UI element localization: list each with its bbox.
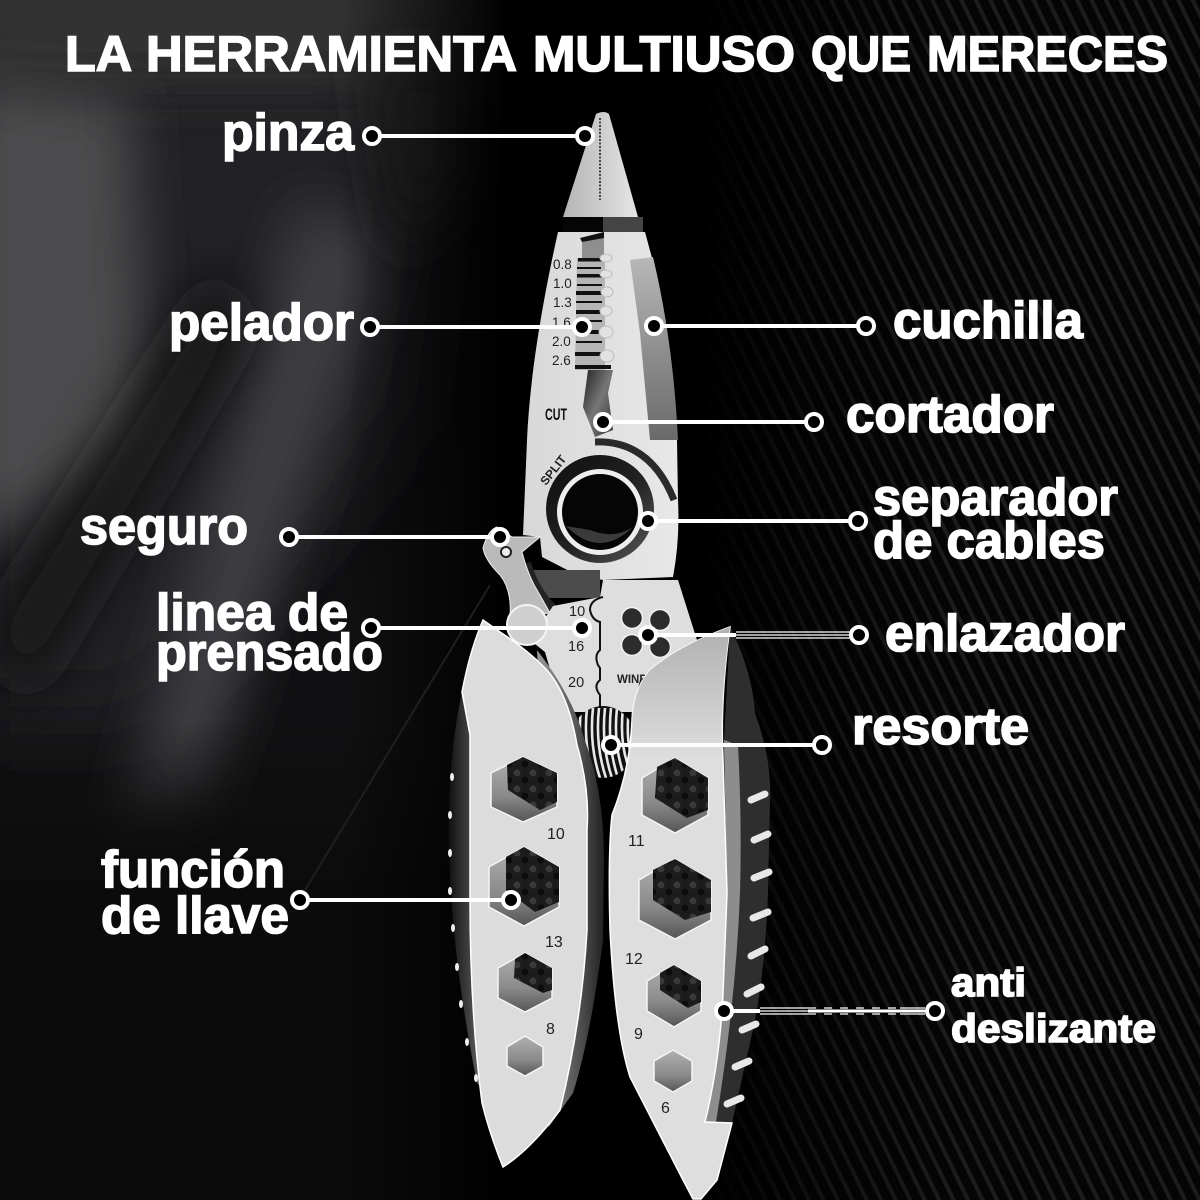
pivot bolt xyxy=(507,605,547,645)
left handle grip xyxy=(449,692,492,1103)
crimp and loop section: 10 xyxy=(569,604,585,620)
wire separator ring: SPLIT xyxy=(537,452,570,488)
wire separator ring xyxy=(537,442,674,563)
spring xyxy=(578,706,631,778)
crimp and loop section: 16 xyxy=(568,639,584,655)
label: función de llave: de llave xyxy=(101,887,289,945)
loop holes xyxy=(622,608,670,658)
label: cortador: cortador xyxy=(846,386,1054,444)
label: separador de cables: separador xyxy=(873,469,1118,527)
label: anti deslizante: deslizante xyxy=(951,1007,1156,1051)
pliers main body xyxy=(523,232,678,580)
pliers main body: 2.6 xyxy=(552,353,571,368)
label: enlazador xyxy=(640,605,1125,663)
right handle grip xyxy=(705,627,770,1123)
label: cortador xyxy=(595,386,1054,444)
title xyxy=(65,26,1168,82)
label: función de llave xyxy=(101,841,519,945)
right handle: 12 xyxy=(625,951,643,968)
left handle: 13 xyxy=(545,934,563,951)
latch seguro xyxy=(483,527,553,617)
label: separador de cables: de cables xyxy=(873,512,1105,570)
label: linea de prensado: prensado xyxy=(156,624,383,682)
label: linea de prensado: linea de xyxy=(156,584,348,642)
label: cuchilla xyxy=(646,292,1084,350)
title: MULTIUSO xyxy=(533,26,795,82)
dark link plate xyxy=(533,570,600,598)
left wrench hexagons xyxy=(489,757,559,1076)
label: anti deslizante: anti xyxy=(951,961,1026,1005)
title: QUE xyxy=(811,26,911,82)
label: función de llave: función xyxy=(101,841,285,899)
pliers tool xyxy=(448,112,770,1199)
right wrench hexagons xyxy=(639,758,711,1092)
label: anti deslizante xyxy=(716,961,1156,1051)
pliers main body: 1.3 xyxy=(553,295,572,310)
label: cuchilla: cuchilla xyxy=(893,292,1084,350)
crimp and loop section xyxy=(530,580,697,712)
label: separador de cables xyxy=(640,469,1118,570)
right handle: 11 xyxy=(628,833,645,850)
label: linea de prensado xyxy=(156,584,590,682)
label: enlazador: enlazador xyxy=(885,605,1125,663)
pliers main body: CUT xyxy=(545,405,567,424)
right handle xyxy=(609,627,770,1199)
pliers upper jaw tip xyxy=(563,112,643,232)
title: LA xyxy=(65,26,132,82)
pliers main body: 1.0 xyxy=(553,276,572,291)
left handle xyxy=(448,620,604,1167)
title: HERRAMIENTA xyxy=(146,26,517,82)
blade cuchilla xyxy=(630,257,678,440)
label: seguro: seguro xyxy=(80,498,248,556)
label: pelador xyxy=(169,294,590,352)
label: pelador: pelador xyxy=(169,294,354,352)
pliers main body: 1.6 xyxy=(552,315,571,330)
right handle: 9 xyxy=(634,1026,643,1043)
label: pinza: pinza xyxy=(222,104,355,162)
right handle: 6 xyxy=(661,1100,670,1117)
crimp and loop section: WINDING xyxy=(617,674,668,686)
left handle: 10 xyxy=(547,826,565,843)
label: seguro xyxy=(80,498,508,556)
pliers main body: 0.8 xyxy=(553,257,572,272)
label: pinza xyxy=(222,104,593,162)
left handle: 8 xyxy=(546,1021,555,1038)
crimp and loop section: 20 xyxy=(568,675,584,691)
label: resorte: resorte xyxy=(852,698,1029,756)
label: resorte xyxy=(603,698,1029,756)
pliers main body: 2.0 xyxy=(552,334,571,349)
wire stripper slots xyxy=(575,232,614,370)
cutter notch xyxy=(583,370,613,437)
title: MERECES xyxy=(927,26,1168,82)
